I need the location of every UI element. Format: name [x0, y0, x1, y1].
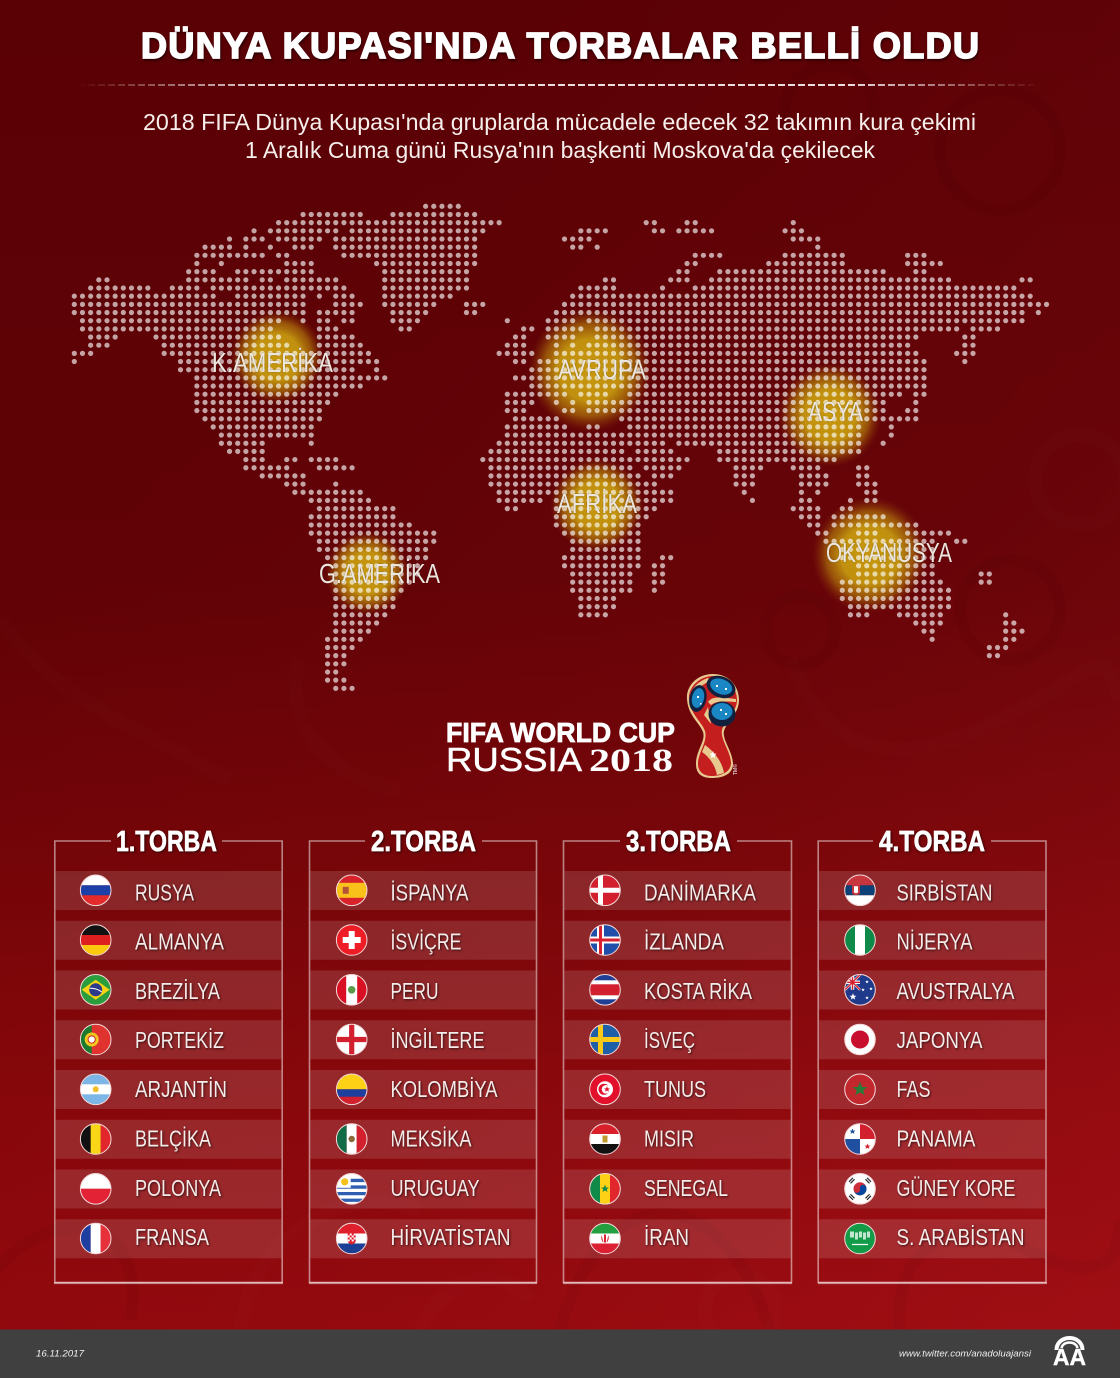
team: PERU: PERU: [390, 978, 438, 1004]
panel: 2.TORBA: [309, 826, 537, 1283]
team: S. ARABİSTAN: S. ARABİSTAN: [896, 1224, 1024, 1250]
team: İSPANYA: İSPANYA: [390, 880, 469, 906]
flag: Peru: [336, 974, 367, 1005]
flag: Portekiz: [80, 1024, 111, 1055]
flag: Mısır: [590, 1124, 620, 1154]
team: PANAMA: PANAMA: [896, 1126, 976, 1152]
team: URUGUAY: URUGUAY: [390, 1175, 480, 1201]
flag: Hırvatistan: [336, 1223, 367, 1254]
flag: S. Arabistan: [845, 1223, 875, 1254]
logo wordmark: FIFA WORLD CUP: [446, 717, 675, 748]
flag: Belçika: [80, 1124, 111, 1154]
team: AVUSTRALYA: AVUSTRALYA: [896, 978, 1015, 1004]
team: TUNUS: TUNUS: [644, 1076, 706, 1102]
icon: trophy: [687, 672, 739, 778]
continent labels: [212, 347, 952, 589]
continent labels: G.AMERİKA: [319, 558, 440, 589]
subtitle: 2018 FIFA Dünya Kupası'nda gruplarda mücadele edecek 32 takımın kura çekimi: [143, 109, 976, 135]
continent labels: ASYA: [808, 396, 863, 427]
flag: İspanya: [336, 875, 367, 906]
team: NİJERYA: NİJERYA: [896, 929, 973, 955]
logo wordmark: [446, 717, 675, 779]
team: SIRBİSTAN: SIRBİSTAN: [896, 880, 992, 906]
team: ARJANTİN: ARJANTİN: [135, 1076, 227, 1102]
flag: Almanya: [80, 925, 111, 955]
heading: 2.TORBA: 2.TORBA: [371, 826, 476, 858]
icon: trophy: TM©: [732, 764, 739, 775]
flag: İngiltere: [336, 1024, 367, 1055]
continent labels: OKYANUSYA: [826, 537, 952, 568]
subtitle: 1 Aralık Cuma günü Rusya'nın başkenti Moskova'da çekilecek: [245, 137, 875, 163]
team: MISIR: MISIR: [644, 1126, 694, 1152]
icon: AA logo: AA: [1053, 1344, 1086, 1370]
continent labels: AFRİKA: [557, 488, 637, 519]
flag: Tunus: [590, 1074, 620, 1105]
heading: 1.TORBA: 1.TORBA: [116, 826, 217, 858]
flag: Arjantin: [80, 1074, 111, 1105]
team: BREZİLYA: BREZİLYA: [135, 978, 221, 1004]
flag: İran: [590, 1223, 620, 1254]
team: JAPONYA: JAPONYA: [896, 1027, 983, 1053]
team: ALMANYA: ALMANYA: [135, 929, 225, 955]
team: KOSTA RİKA: KOSTA RİKA: [644, 978, 753, 1004]
logo wordmark: 2018: [589, 743, 673, 779]
flag: İsveç: [590, 1024, 620, 1055]
flag: Polonya: [80, 1174, 111, 1204]
continent labels: K.AMERİKA: [212, 347, 333, 378]
team: KOLOMBİYA: KOLOMBİYA: [390, 1076, 498, 1102]
flag: Panama: [845, 1124, 875, 1154]
team: MEKSİKA: MEKSİKA: [390, 1126, 472, 1152]
flag: Güney Kore: [845, 1174, 875, 1204]
team: İNGİLTERE: İNGİLTERE: [390, 1027, 484, 1053]
team: DANİMARKA: DANİMARKA: [644, 880, 757, 906]
flag: Fransa: [80, 1223, 111, 1254]
heading: 3.TORBA: 3.TORBA: [626, 826, 731, 858]
team: POLONYA: POLONYA: [135, 1175, 222, 1201]
team: BELÇİKA: BELÇİKA: [135, 1126, 212, 1152]
heading: 4.TORBA: 4.TORBA: [879, 826, 985, 858]
flag: İsviçre: [336, 925, 367, 955]
team: İSVEÇ: İSVEÇ: [644, 1027, 695, 1053]
team: İSVİÇRE: İSVİÇRE: [390, 929, 462, 955]
team: İRAN: İRAN: [644, 1224, 689, 1250]
flag: Sırbistan: [845, 875, 875, 906]
flag: Nijerya: [845, 925, 875, 955]
flag: Meksika: [336, 1124, 367, 1154]
team: FAS: FAS: [896, 1076, 930, 1102]
flag: Uruguay: [336, 1174, 367, 1204]
flag: İzlanda: [590, 925, 620, 955]
team: FRANSA: FRANSA: [135, 1224, 210, 1250]
dotted continents: [74, 206, 1047, 688]
flag: Brezilya: [80, 974, 111, 1005]
flag: Senegal: [590, 1174, 620, 1204]
glow spots: [230, 308, 928, 615]
flag: Avustralya: [845, 974, 875, 1005]
logo wordmark: RUSSIA: [446, 741, 582, 778]
date: 16.11.2017: [36, 1348, 85, 1360]
panel: 3.TORBA: [563, 826, 792, 1283]
team: İZLANDA: İZLANDA: [644, 929, 725, 955]
logo: FIFA World Cup Russia 2018: [446, 672, 739, 779]
team: RUSYA: RUSYA: [135, 880, 194, 906]
world map: [74, 206, 1047, 688]
team: HİRVATİSTAN: HİRVATİSTAN: [390, 1224, 510, 1250]
team: SENEGAL: SENEGAL: [644, 1175, 728, 1201]
team: GÜNEY KORE: GÜNEY KORE: [896, 1175, 1016, 1201]
panel: 1.TORBA: [54, 826, 283, 1283]
flag: Fas: [845, 1074, 875, 1105]
flag: Rusya: [80, 875, 111, 906]
subtitle: [143, 109, 976, 163]
flag: Danimarka: [590, 875, 620, 906]
panel: 4.TORBA: [818, 826, 1047, 1283]
flag: Japonya: [845, 1024, 875, 1055]
team: PORTEKİZ: PORTEKİZ: [135, 1027, 224, 1053]
source link: www.twitter.com/anadoluajansi: [899, 1348, 1032, 1360]
flag: Kolombiya: [336, 1074, 367, 1105]
title: DÜNYA KUPASI'NDA TORBALAR BELLİ OLDU: [141, 25, 979, 66]
continent labels: AVRUPA: [558, 354, 646, 385]
footer bar: [0, 1330, 1120, 1378]
flag: Kosta Rika: [590, 974, 620, 1005]
